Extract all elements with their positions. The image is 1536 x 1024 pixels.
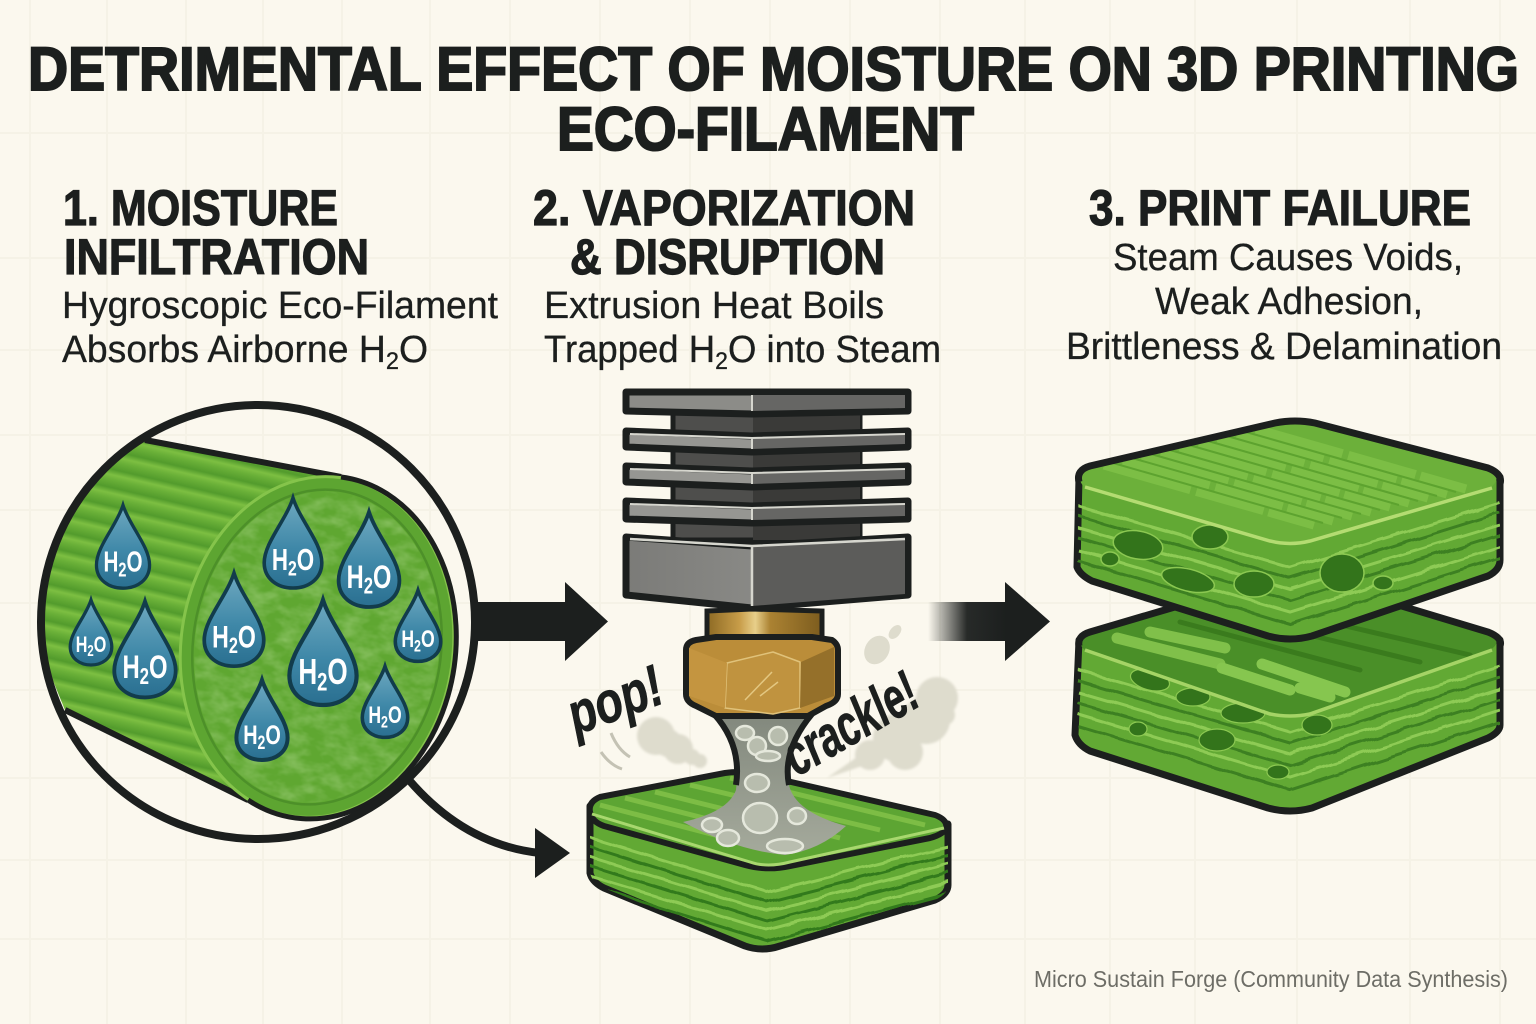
droplet 4	[264, 498, 322, 588]
droplet 4: O	[297, 543, 314, 577]
filament body	[20, 440, 341, 800]
droplet 1: 2	[118, 560, 126, 582]
text block: step 3 description: Brittleness & Delamination	[1066, 326, 1502, 368]
slab outline and rim	[1078, 421, 1500, 484]
title: ECO-FILAMENT	[557, 95, 974, 163]
text block: step 1 description: Absorbs Airborne H	[62, 329, 392, 371]
block sides	[590, 806, 948, 949]
heading: step 1 moisture infiltration	[63, 180, 369, 285]
block top face	[590, 772, 946, 868]
lower slab top face	[1080, 606, 1496, 715]
droplet 9: H	[368, 702, 386, 729]
block top ribs	[592, 778, 944, 865]
droplet 8: H	[401, 626, 419, 653]
heading: step 1 moisture infiltration: INFILTRATION	[64, 229, 369, 285]
lower slab voids	[1128, 665, 1332, 779]
droplet 3: H	[122, 648, 146, 685]
droplet 9: 2	[381, 712, 388, 731]
title	[28, 35, 1519, 163]
sound effect: crackle: crackle!	[771, 659, 930, 788]
heading: step 2 vaporization and disruption	[533, 180, 915, 285]
lower slab outline and rim	[1079, 604, 1500, 716]
heading: step 2 vaporization and disruption: & DISRUPTION	[570, 229, 885, 285]
slab sides	[1077, 477, 1500, 639]
droplet 1: O	[126, 546, 143, 578]
slab ribs	[1104, 429, 1466, 525]
steam motion lines	[601, 733, 630, 769]
droplet 2: H	[76, 632, 92, 657]
text block: step 1 description	[62, 285, 498, 375]
text block: step 3 description	[1066, 237, 1502, 368]
arrow: nozzle to print failure	[928, 582, 1050, 661]
droplet 10: O	[265, 719, 281, 750]
text block: step 2 description	[544, 285, 941, 375]
droplet 3	[114, 601, 176, 697]
droplet 2	[70, 600, 112, 665]
text block: step 2 description: Extrusion Heat Boils	[544, 285, 884, 327]
extruded bubbling filament	[683, 714, 846, 855]
heading: step 3 print failure: 3. PRINT FAILURE	[1089, 180, 1471, 236]
droplet 6: 2	[229, 633, 238, 658]
droplet 10	[236, 680, 288, 760]
water droplets	[70, 498, 441, 760]
source credit: Micro Sustain Forge (Community Data Synthesis)	[1034, 966, 1508, 992]
magnified filament cross-section	[20, 405, 475, 839]
slab voids	[1101, 525, 1393, 597]
text block: step 2 description: Trapped H	[544, 329, 722, 371]
droplet 1: H	[103, 546, 124, 578]
droplet 10: H	[243, 719, 263, 750]
slab layer lines	[1078, 503, 1500, 624]
droplet 8: O	[421, 626, 435, 653]
text block: step 2 description: 2	[715, 348, 728, 375]
filament outline edge	[248, 477, 456, 819]
steam puff left	[637, 717, 707, 768]
heat sink fin shaded faces	[752, 395, 905, 520]
droplet 9	[362, 666, 408, 737]
droplet 8	[395, 590, 441, 661]
text block: step 1 description: 2	[386, 348, 399, 375]
droplet 5: O	[373, 559, 391, 595]
heater block	[626, 537, 908, 608]
droplet 9: O	[388, 702, 402, 729]
magnifier circle	[41, 405, 475, 839]
droplet 6: O	[238, 619, 256, 655]
text block: step 1 description: Hygroscopic Eco-Filament	[62, 285, 498, 327]
heat sink fin highlights	[630, 395, 905, 520]
text block: step 1 description: O	[399, 329, 428, 371]
heading: step 1 moisture infiltration: 1. MOISTURE	[63, 180, 338, 236]
droplet 3: O	[149, 648, 168, 685]
brass neck	[707, 609, 822, 642]
heat sink core	[673, 410, 860, 540]
brass hex nut	[686, 637, 838, 716]
droplet 7: H	[298, 652, 324, 692]
droplet 5: 2	[364, 573, 373, 599]
droplet 3: 2	[140, 663, 149, 689]
lower slab sides	[1075, 640, 1500, 811]
droplet 2: O	[94, 632, 106, 657]
droplet 1	[96, 505, 150, 588]
droplet 4: 2	[288, 555, 297, 580]
heading: step 2 vaporization and disruption: 2. VAPORIZATION	[533, 180, 915, 236]
arrow: curved, filament to printed layer	[409, 780, 570, 878]
heat sink fins	[626, 392, 908, 523]
hot end nozzle	[626, 392, 908, 855]
lower slab ribs	[1117, 618, 1470, 697]
text block: step 2 description: O into Steam	[728, 329, 941, 371]
text block: step 3 description: Weak Adhesion,	[1155, 281, 1423, 323]
filament cut face	[159, 459, 475, 835]
droplet 6: H	[212, 619, 235, 655]
droplet 7	[289, 600, 357, 705]
arrow: filament to nozzle	[472, 582, 608, 661]
lower slab layer lines	[1078, 666, 1500, 790]
droplet 5: H	[347, 559, 370, 595]
droplet 5	[339, 512, 399, 607]
droplet 10: 2	[258, 733, 265, 754]
steam puff small	[859, 623, 904, 669]
droplet 8: 2	[414, 636, 421, 655]
failed print: upper delaminated slab	[1077, 421, 1500, 639]
slab top face	[1080, 423, 1496, 544]
failed print: lower slab	[1075, 604, 1500, 811]
steam puff right	[827, 677, 958, 778]
sound effect: pop: pop!	[557, 653, 672, 748]
text block: step 3 description: Steam Causes Voids,	[1113, 237, 1463, 279]
printed layer block under nozzle	[590, 772, 950, 949]
droplet 6	[204, 573, 264, 666]
droplet 4: H	[272, 543, 294, 577]
droplet 7: O	[327, 652, 348, 692]
droplet 7: 2	[317, 668, 327, 696]
droplet 2: 2	[87, 643, 94, 660]
block layer lines	[590, 838, 950, 941]
